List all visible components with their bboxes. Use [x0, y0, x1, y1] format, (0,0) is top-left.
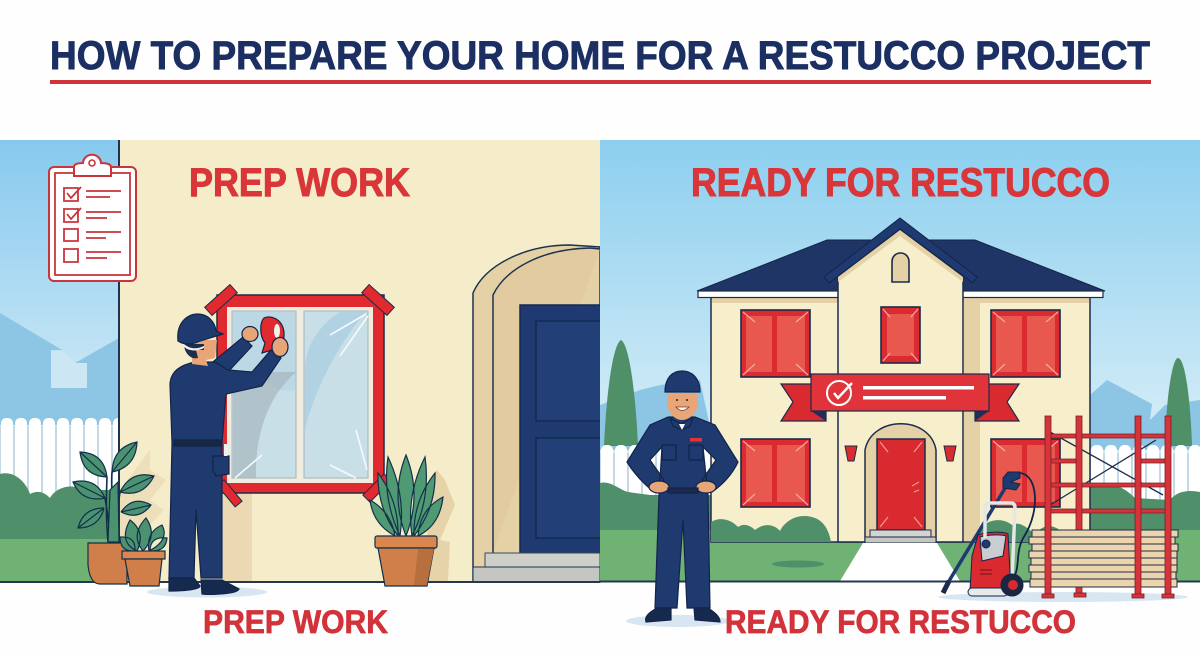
heading: ready for restucco: READY FOR RESTUCCO: [691, 161, 1110, 205]
plant shadow on wall: [120, 450, 166, 582]
leaf 1: [80, 452, 107, 477]
neck and face: [192, 340, 217, 366]
spray gun: [1003, 472, 1020, 490]
banner band: [811, 374, 989, 411]
panel: prep work scene: [0, 140, 601, 598]
checklist item 4: [64, 249, 121, 262]
ground line: [0, 581, 600, 583]
ground shadow: [147, 586, 267, 598]
clip ring: [89, 160, 95, 166]
plank 4: [1029, 551, 1177, 558]
panes: [746, 445, 805, 502]
window frame: [741, 439, 810, 507]
plank 7: [1031, 572, 1176, 579]
tape corner bottom right: [363, 474, 391, 502]
window frame: [741, 310, 810, 377]
pot rim: [375, 536, 437, 548]
right hand: [696, 481, 716, 493]
centre gable wall: [838, 230, 963, 542]
arched doorway: [473, 245, 601, 582]
lower step: [473, 567, 600, 582]
scaffold: [1048, 416, 1168, 597]
right wing wall shade: [964, 297, 980, 541]
banner right tail: [975, 384, 1019, 421]
checklist item 2: [64, 208, 121, 222]
shrubs right: [975, 520, 1070, 542]
banner text line 2: [863, 396, 946, 400]
roll of tape: [261, 317, 284, 353]
banner fold right: [975, 411, 989, 421]
worker shadow on wall: [223, 493, 252, 582]
plastic creases: [743, 441, 808, 505]
upper entry step: [870, 530, 931, 537]
left chest pocket: [662, 445, 676, 460]
worker taping window: [147, 314, 288, 598]
wheel: [1001, 574, 1023, 596]
small succulent in pot: [120, 518, 167, 586]
plastic creases: [993, 312, 1058, 375]
leafy plant in pot: [73, 442, 154, 584]
arch inner line: [493, 248, 600, 553]
covered window upper right: [991, 310, 1060, 377]
hedge right: [1085, 484, 1200, 535]
door plastic creases: [880, 442, 922, 527]
smile: [676, 407, 689, 410]
plastic sheen left: [233, 312, 295, 391]
washer base: [968, 588, 1008, 596]
collar: [670, 418, 693, 430]
spiky leaves: [370, 455, 443, 536]
pane: [887, 314, 914, 356]
right boot: [694, 608, 720, 622]
plank 2: [1029, 537, 1175, 544]
banner: [781, 374, 1019, 421]
wall lamp left: [845, 446, 857, 461]
shrubs left: [711, 516, 831, 542]
leaf 5: [121, 501, 151, 515]
cypress tree right: [1165, 358, 1192, 446]
upper step: [485, 553, 600, 567]
torso, legs and front arm: [169, 350, 281, 578]
two storey house: [697, 218, 1105, 543]
lawn: [0, 539, 120, 582]
tape corner top left: [205, 285, 237, 315]
right chest pocket: [689, 445, 703, 460]
pressure washer: [943, 472, 1035, 596]
eyes: [676, 399, 688, 401]
panes: [996, 316, 1055, 372]
scaffold braces: [1050, 432, 1163, 505]
checklist item 3: [64, 229, 121, 241]
gable roof band: [824, 218, 977, 283]
pouch tool: [224, 444, 228, 456]
tape roll hole: [274, 324, 280, 338]
succulent leaves: [120, 518, 167, 551]
leaf 6: [78, 508, 104, 528]
plastic creases: [993, 441, 1058, 451]
lance: [946, 480, 1010, 586]
hose: [1015, 473, 1035, 575]
arched attic window: [892, 253, 909, 282]
plank 1: [1032, 530, 1178, 537]
hip roof: [697, 240, 1105, 291]
white soffit: [698, 291, 1103, 298]
clipboard clip: [74, 155, 111, 176]
scaffold foot: [1074, 593, 1086, 597]
entry arch: [865, 424, 936, 542]
panel: ready for restucco scene: [600, 140, 1200, 627]
plank 3: [1032, 544, 1178, 551]
washer top plate: [980, 535, 1006, 561]
main walls: [711, 295, 1090, 542]
background house silhouette right: [1090, 380, 1200, 450]
eave shadow: [712, 297, 1089, 303]
caption: ready for restucco: READY FOR RESTUCCO: [725, 604, 1076, 640]
plastic fold shadow: [233, 372, 296, 478]
right glass: [304, 311, 368, 478]
covered window lower right: [991, 439, 1060, 507]
hedge left: [600, 482, 712, 535]
pot shade: [414, 549, 434, 585]
wheel hub: [1008, 580, 1018, 590]
red tape frame: [217, 295, 384, 493]
tool pouch: [213, 456, 229, 476]
terracotta pot: [88, 543, 127, 584]
washer gauge: [982, 540, 990, 548]
plastic sheen right: [305, 312, 366, 430]
lawn shadow: [772, 560, 824, 568]
belt: [668, 488, 698, 493]
gable inner shade: [838, 230, 963, 282]
shirt: [679, 424, 685, 430]
right sky: [600, 140, 1200, 582]
nozzle: [943, 581, 949, 593]
ground line: [600, 580, 1200, 582]
hair: [184, 344, 204, 358]
fence left: [600, 445, 725, 515]
scaffold rear post: [1076, 416, 1082, 596]
rear arm: [208, 337, 252, 372]
pot body: [378, 548, 434, 586]
plastic creases: [743, 312, 808, 375]
covered window upper centre: [881, 307, 920, 363]
white fence: [0, 418, 119, 508]
leaf 4: [73, 481, 105, 499]
window frame: [881, 307, 920, 363]
pot body: [125, 559, 162, 586]
feet: [1042, 594, 1174, 598]
plant shadow right: [425, 470, 455, 582]
plastic glints: [235, 314, 368, 478]
pot rim: [122, 551, 165, 559]
clipboard inner sheet: [55, 173, 130, 275]
belt: [174, 440, 222, 446]
navy door: [520, 305, 601, 553]
upper door panel: [536, 321, 601, 421]
wall edge: [118, 140, 120, 582]
banner check mark: [834, 383, 852, 398]
panes: [746, 316, 805, 372]
ground shadow for equipment: [938, 592, 1188, 602]
leaf 3: [120, 475, 154, 493]
caption: prep work: PREP WORK: [203, 604, 388, 640]
banner fold left: [811, 411, 826, 421]
rear hand: [242, 326, 258, 342]
post 4: [1165, 416, 1171, 594]
lawn: [600, 530, 1200, 582]
post 1: [1045, 416, 1051, 594]
neighbouring house silhouettes: [0, 313, 119, 425]
wall: [119, 140, 600, 582]
masked window: [205, 285, 394, 507]
title underline: [50, 80, 1151, 84]
left boot: [169, 578, 200, 591]
tape corner top right: [362, 285, 394, 315]
hedge: [0, 473, 119, 540]
fence right: [1085, 445, 1200, 515]
washer vents: [980, 570, 992, 574]
title: HOW TO PREPARE YOUR HOME FOR A RESTUCCO PROJECT: [50, 34, 1150, 78]
hard hat: [665, 371, 700, 392]
name badge: [690, 438, 702, 442]
panes: [996, 445, 1055, 502]
ground shadow: [626, 615, 730, 627]
cypress tree left: [604, 340, 638, 446]
clipboard board: [49, 167, 136, 281]
red front door: [877, 439, 925, 530]
background house silhouette left: [600, 380, 715, 450]
plastic creases: [883, 309, 918, 361]
spiky plant in pot: [370, 455, 443, 586]
washer body: [970, 532, 1011, 590]
leaf 2: [112, 442, 137, 472]
tape corner bottom left: [217, 480, 242, 507]
left sky: [0, 140, 120, 582]
lower door panel: [536, 438, 601, 538]
scaffold rails: [1048, 434, 1168, 561]
scaffold front posts: [1042, 416, 1174, 598]
covered window upper left: [741, 310, 810, 377]
white window frame: [227, 307, 373, 483]
arch surround: [473, 245, 600, 582]
hard hat: [178, 314, 223, 344]
face: [667, 393, 698, 420]
window frame: [991, 310, 1060, 377]
banner left tail: [781, 384, 826, 421]
stem sheath: [108, 482, 119, 542]
window frame: [991, 439, 1060, 507]
covered window lower left: [741, 439, 810, 507]
left glass: [232, 311, 296, 478]
plank 5: [1031, 558, 1177, 565]
smiling worker: [626, 371, 738, 627]
plank 6: [1029, 565, 1177, 572]
uniform body and arms: [627, 417, 738, 608]
left hand: [649, 481, 669, 493]
silhouette window: [51, 351, 87, 388]
left boot: [646, 608, 671, 622]
post 3: [1135, 416, 1141, 594]
handle frame: [985, 503, 1015, 580]
lower entry step: [865, 537, 936, 543]
banner text line 1: [863, 386, 974, 390]
hat band: [183, 343, 204, 350]
walkway: [840, 543, 960, 581]
plank 8: [1030, 579, 1177, 587]
banner check circle: [827, 381, 851, 405]
plant stems: [105, 472, 120, 542]
front hand: [272, 338, 288, 356]
heading: prep work: PREP WORK: [189, 161, 410, 205]
checklist item 1: [64, 187, 121, 201]
clipboard icon: [49, 155, 136, 281]
lumber stack: [1029, 530, 1178, 587]
wall lamp right: [944, 446, 956, 461]
right boot: [201, 580, 239, 594]
